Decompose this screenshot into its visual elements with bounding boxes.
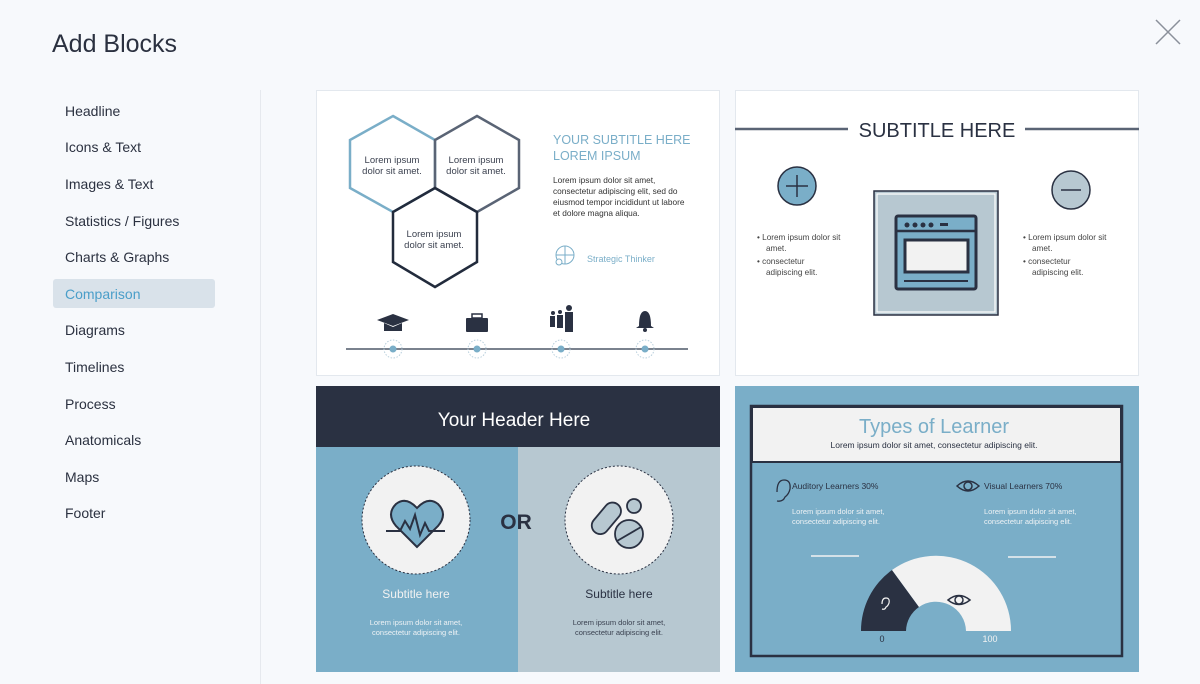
subtitle: LOREM IPSUM bbox=[553, 149, 641, 163]
panel: hexagons card: dolor sit amet. bbox=[362, 166, 422, 177]
sidebar menu: Icons & Text bbox=[65, 139, 141, 155]
panel: subtitle card: • consectetur bbox=[757, 257, 805, 266]
panel: hexagons card: Strategic Thinker bbox=[587, 254, 655, 264]
panel: types of learner card bbox=[735, 386, 1139, 672]
panel: comparison card: consectetur adipiscing elit. bbox=[575, 628, 663, 637]
panel: types of learner card: 0 bbox=[879, 634, 885, 644]
panel: types of learner card: Lorem ipsum dolor sit amet, bbox=[984, 507, 1077, 516]
icon: ear bbox=[777, 480, 790, 501]
sidebar menu: Charts & Graphs bbox=[65, 249, 169, 265]
panel: subtitle card: • Lorem ipsum dolor sit bbox=[1023, 233, 1107, 242]
sidebar menu: Anatomicals bbox=[65, 432, 141, 448]
chart: gauge bbox=[861, 570, 919, 631]
sidebar menu: Statistics / Figures bbox=[65, 213, 179, 229]
panel: hexagons card: Lorem ipsum bbox=[449, 155, 504, 166]
icon: minus bbox=[1052, 171, 1090, 209]
panel: comparison card: Lorem ipsum dolor sit amet, bbox=[370, 618, 462, 627]
panel: comparison card bbox=[316, 386, 720, 672]
sidebar menu: Timelines bbox=[65, 359, 124, 375]
panel: hexagons card: dolor sit amet. bbox=[404, 240, 464, 251]
sidebar menu bbox=[0, 90, 261, 684]
title: Add Blocks bbox=[52, 30, 177, 58]
subtitle bbox=[553, 133, 691, 163]
panel: types of learner card: Lorem ipsum dolor sit amet, consectetur adipiscing elit. bbox=[831, 440, 1037, 450]
panel: comparison card: Subtitle here bbox=[382, 587, 450, 601]
panel: types of learner card: Lorem ipsum dolor sit amet, bbox=[792, 507, 885, 516]
panel: subtitle card bbox=[735, 90, 1139, 376]
panel: hexagons card: dolor sit amet. bbox=[446, 166, 506, 177]
panel: hexagons card: et dolore magna aliqua. bbox=[553, 208, 640, 218]
sidebar menu: Footer bbox=[65, 505, 105, 521]
icons: timeline bbox=[377, 305, 654, 332]
icon: plus bbox=[778, 167, 816, 205]
panel: hexagons card bbox=[316, 90, 720, 376]
panel: comparison card: Lorem ipsum dolor sit amet, bbox=[573, 618, 665, 627]
panel: hexagons card: Lorem ipsum bbox=[365, 155, 420, 166]
panel: subtitle card: amet. bbox=[1032, 244, 1052, 253]
panel: comparison card: Subtitle here bbox=[585, 587, 653, 601]
icon: eye bbox=[957, 481, 979, 491]
panel: subtitle card: amet. bbox=[766, 244, 786, 253]
panel: types of learner card: Types of Learner bbox=[859, 416, 1009, 438]
panel: comparison card: Your Header Here bbox=[438, 410, 590, 431]
panel: hexagons card: consectetur adipiscing elit, sed do bbox=[553, 186, 678, 196]
panel: subtitle card: adipiscing elit. bbox=[766, 268, 817, 277]
text: OR: OR bbox=[500, 511, 532, 534]
icon: pills circle bbox=[565, 466, 673, 574]
icon: oven bbox=[874, 191, 998, 315]
panel: hexagons card: Lorem ipsum bbox=[407, 229, 462, 240]
panel: subtitle card: • consectetur bbox=[1023, 257, 1071, 266]
sidebar menu: Maps bbox=[65, 469, 99, 485]
sidebar menu: Images & Text bbox=[65, 176, 153, 192]
panel: types of learner card: consectetur adipiscing elit. bbox=[984, 517, 1072, 526]
sidebar menu: Headline bbox=[65, 103, 120, 119]
panel: subtitle card: SUBTITLE HERE bbox=[859, 120, 1015, 142]
sidebar menu: Diagrams bbox=[65, 322, 125, 338]
panel: hexagons card: eiusmod tempor incididunt ut labore bbox=[553, 197, 685, 207]
icon: heart circle bbox=[362, 466, 470, 574]
panel: comparison card: consectetur adipiscing elit. bbox=[372, 628, 460, 637]
icon: globe thinker bbox=[556, 246, 574, 265]
panel: subtitle card: • Lorem ipsum dolor sit bbox=[757, 233, 841, 242]
timeline bbox=[346, 348, 688, 350]
subtitle: YOUR SUBTITLE HERE bbox=[553, 133, 691, 147]
sidebar menu: Comparison bbox=[65, 286, 140, 302]
panel: types of learner card: Auditory Learners 30% bbox=[792, 481, 879, 491]
sidebar menu: Process bbox=[65, 396, 116, 412]
selected highlight bbox=[53, 279, 215, 308]
panel: hexagons card: Lorem ipsum dolor sit amet, bbox=[553, 175, 655, 185]
hexagons bbox=[350, 116, 519, 287]
icon: close bbox=[1156, 20, 1180, 44]
panel: types of learner card: 100 bbox=[982, 634, 998, 644]
panel: types of learner card: consectetur adipiscing elit. bbox=[792, 517, 880, 526]
panel: subtitle card: adipiscing elit. bbox=[1032, 268, 1083, 277]
panel: types of learner card: Visual Learners 70% bbox=[984, 481, 1063, 491]
